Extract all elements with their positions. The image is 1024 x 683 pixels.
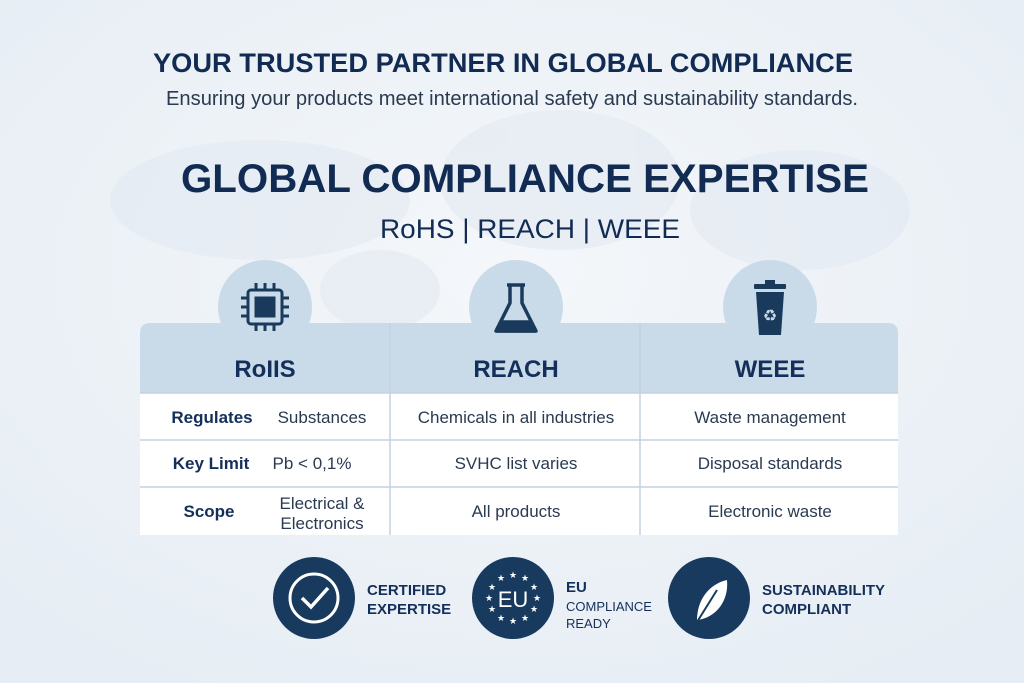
- icon circles: [218, 260, 817, 354]
- table: Substances: [278, 408, 366, 427]
- badge: EU: ★: [488, 582, 496, 592]
- badge: EU: [472, 557, 652, 639]
- table: Scope: [183, 502, 235, 521]
- badge: EU: ★: [488, 604, 496, 614]
- table: Waste management: [694, 408, 846, 427]
- badge: EU: ★: [497, 573, 505, 583]
- badge: EU: ★: [509, 570, 517, 580]
- table: Key Limit: [173, 454, 250, 473]
- badge: EU: EU: [498, 587, 528, 612]
- badge: EU: ★: [485, 593, 493, 603]
- badge: sustainability: [668, 557, 885, 639]
- badge: EU: READY: [566, 616, 611, 631]
- table: Chemicals in all industries: [418, 408, 614, 427]
- badge: sustainability: COMPLIANT: [762, 601, 851, 618]
- badge: EU: ★: [521, 613, 529, 623]
- badge: EU: ★: [521, 573, 529, 583]
- badge: EU: ★: [509, 616, 517, 626]
- table: Electronics: [280, 514, 364, 533]
- badge: EU: ★: [497, 613, 505, 623]
- table: Pb < 0,1%: [273, 454, 351, 473]
- table: WEEE: [735, 356, 805, 383]
- badge: certified: EXPERTISE: [367, 601, 451, 618]
- table: Electronic waste: [708, 502, 832, 521]
- badge: certified: CERTIFIED: [367, 582, 446, 599]
- icon: recycle bin: ♻: [763, 308, 777, 325]
- title: YOUR TRUSTED PARTNER IN GLOBAL COMPLIANCE: [153, 48, 853, 78]
- badge: EU: ★: [530, 582, 538, 592]
- icon: recycle bin: [754, 280, 786, 335]
- subheading: RoHS | REACH | WEEE: [380, 214, 680, 244]
- table: REACH: [473, 356, 559, 383]
- icon: flask: [496, 285, 536, 331]
- table: RoIIS: [234, 356, 296, 383]
- badge: EU: COMPLIANCE: [566, 599, 652, 614]
- badge: EU: ★: [533, 593, 541, 603]
- badge: sustainability: SUSTAINABILITY: [762, 582, 885, 599]
- table: Disposal standards: [698, 454, 842, 473]
- table: Electrical &: [279, 494, 365, 513]
- badge: certified: [273, 557, 451, 639]
- table: All products: [472, 502, 560, 521]
- icon: chip: [241, 283, 289, 331]
- table: SVHC list varies: [455, 454, 577, 473]
- badge: EU: ★: [530, 604, 538, 614]
- badge: EU: EU: [566, 579, 587, 596]
- table: Regulates: [171, 408, 253, 427]
- table: [140, 323, 898, 535]
- heading: GLOBAL COMPLIANCE EXPERTISE: [181, 157, 869, 201]
- subtitle: Ensuring your products meet international safety and sustainability standards.: [166, 88, 858, 110]
